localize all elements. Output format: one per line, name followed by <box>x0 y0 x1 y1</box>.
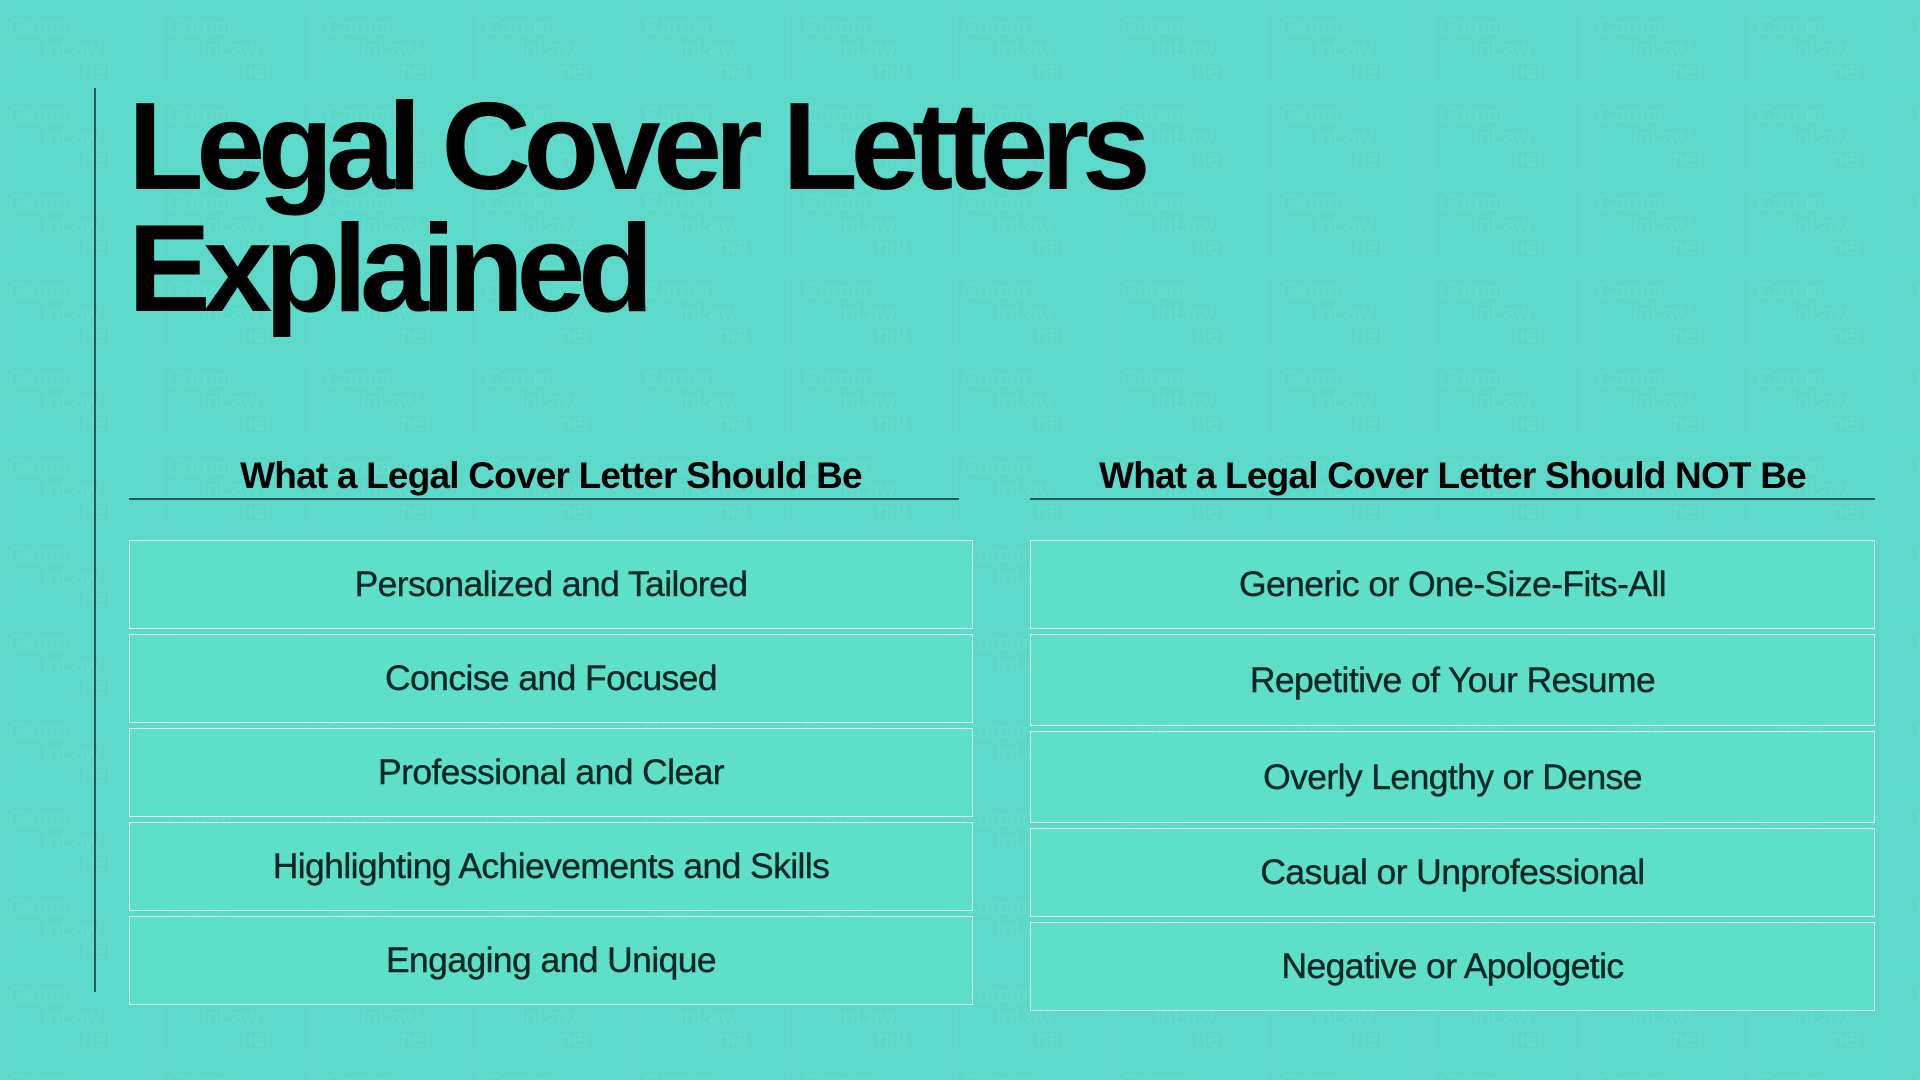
item: Engaging and Unique <box>386 940 716 980</box>
item: Generic or One-Size-Fits-All <box>1239 564 1666 604</box>
item: Personalized and Tailored <box>355 564 747 604</box>
item <box>1030 634 1875 726</box>
item: Casual or Unprofessional <box>1260 852 1645 892</box>
item <box>129 728 973 817</box>
item: Overly Lengthy or Dense <box>1263 756 1642 796</box>
item <box>129 540 973 629</box>
heading: should be: What a Legal Cover Letter Should Be <box>240 455 862 496</box>
item <box>1030 922 1875 1011</box>
item: Repetitive of Your Resume <box>1250 660 1655 700</box>
item: Concise and Focused <box>385 658 717 698</box>
heading: should not be: What a Legal Cover Letter Should NOT Be <box>1099 455 1806 496</box>
title: Explained <box>128 200 646 338</box>
vertical accent line <box>94 88 96 992</box>
item <box>129 634 973 723</box>
item: Negative or Apologetic <box>1281 946 1624 986</box>
panel: should not be list <box>1030 540 1875 1011</box>
item <box>1030 828 1875 917</box>
item <box>129 916 973 1005</box>
title: Legal Cover Letters <box>128 78 1143 216</box>
item <box>1030 540 1875 629</box>
item <box>1030 731 1875 823</box>
item: Professional and Clear <box>378 752 724 792</box>
item <box>129 822 973 911</box>
panel: should be list <box>129 540 973 1005</box>
title <box>128 78 1146 338</box>
item: Highlighting Achievements and Skills <box>273 846 829 886</box>
